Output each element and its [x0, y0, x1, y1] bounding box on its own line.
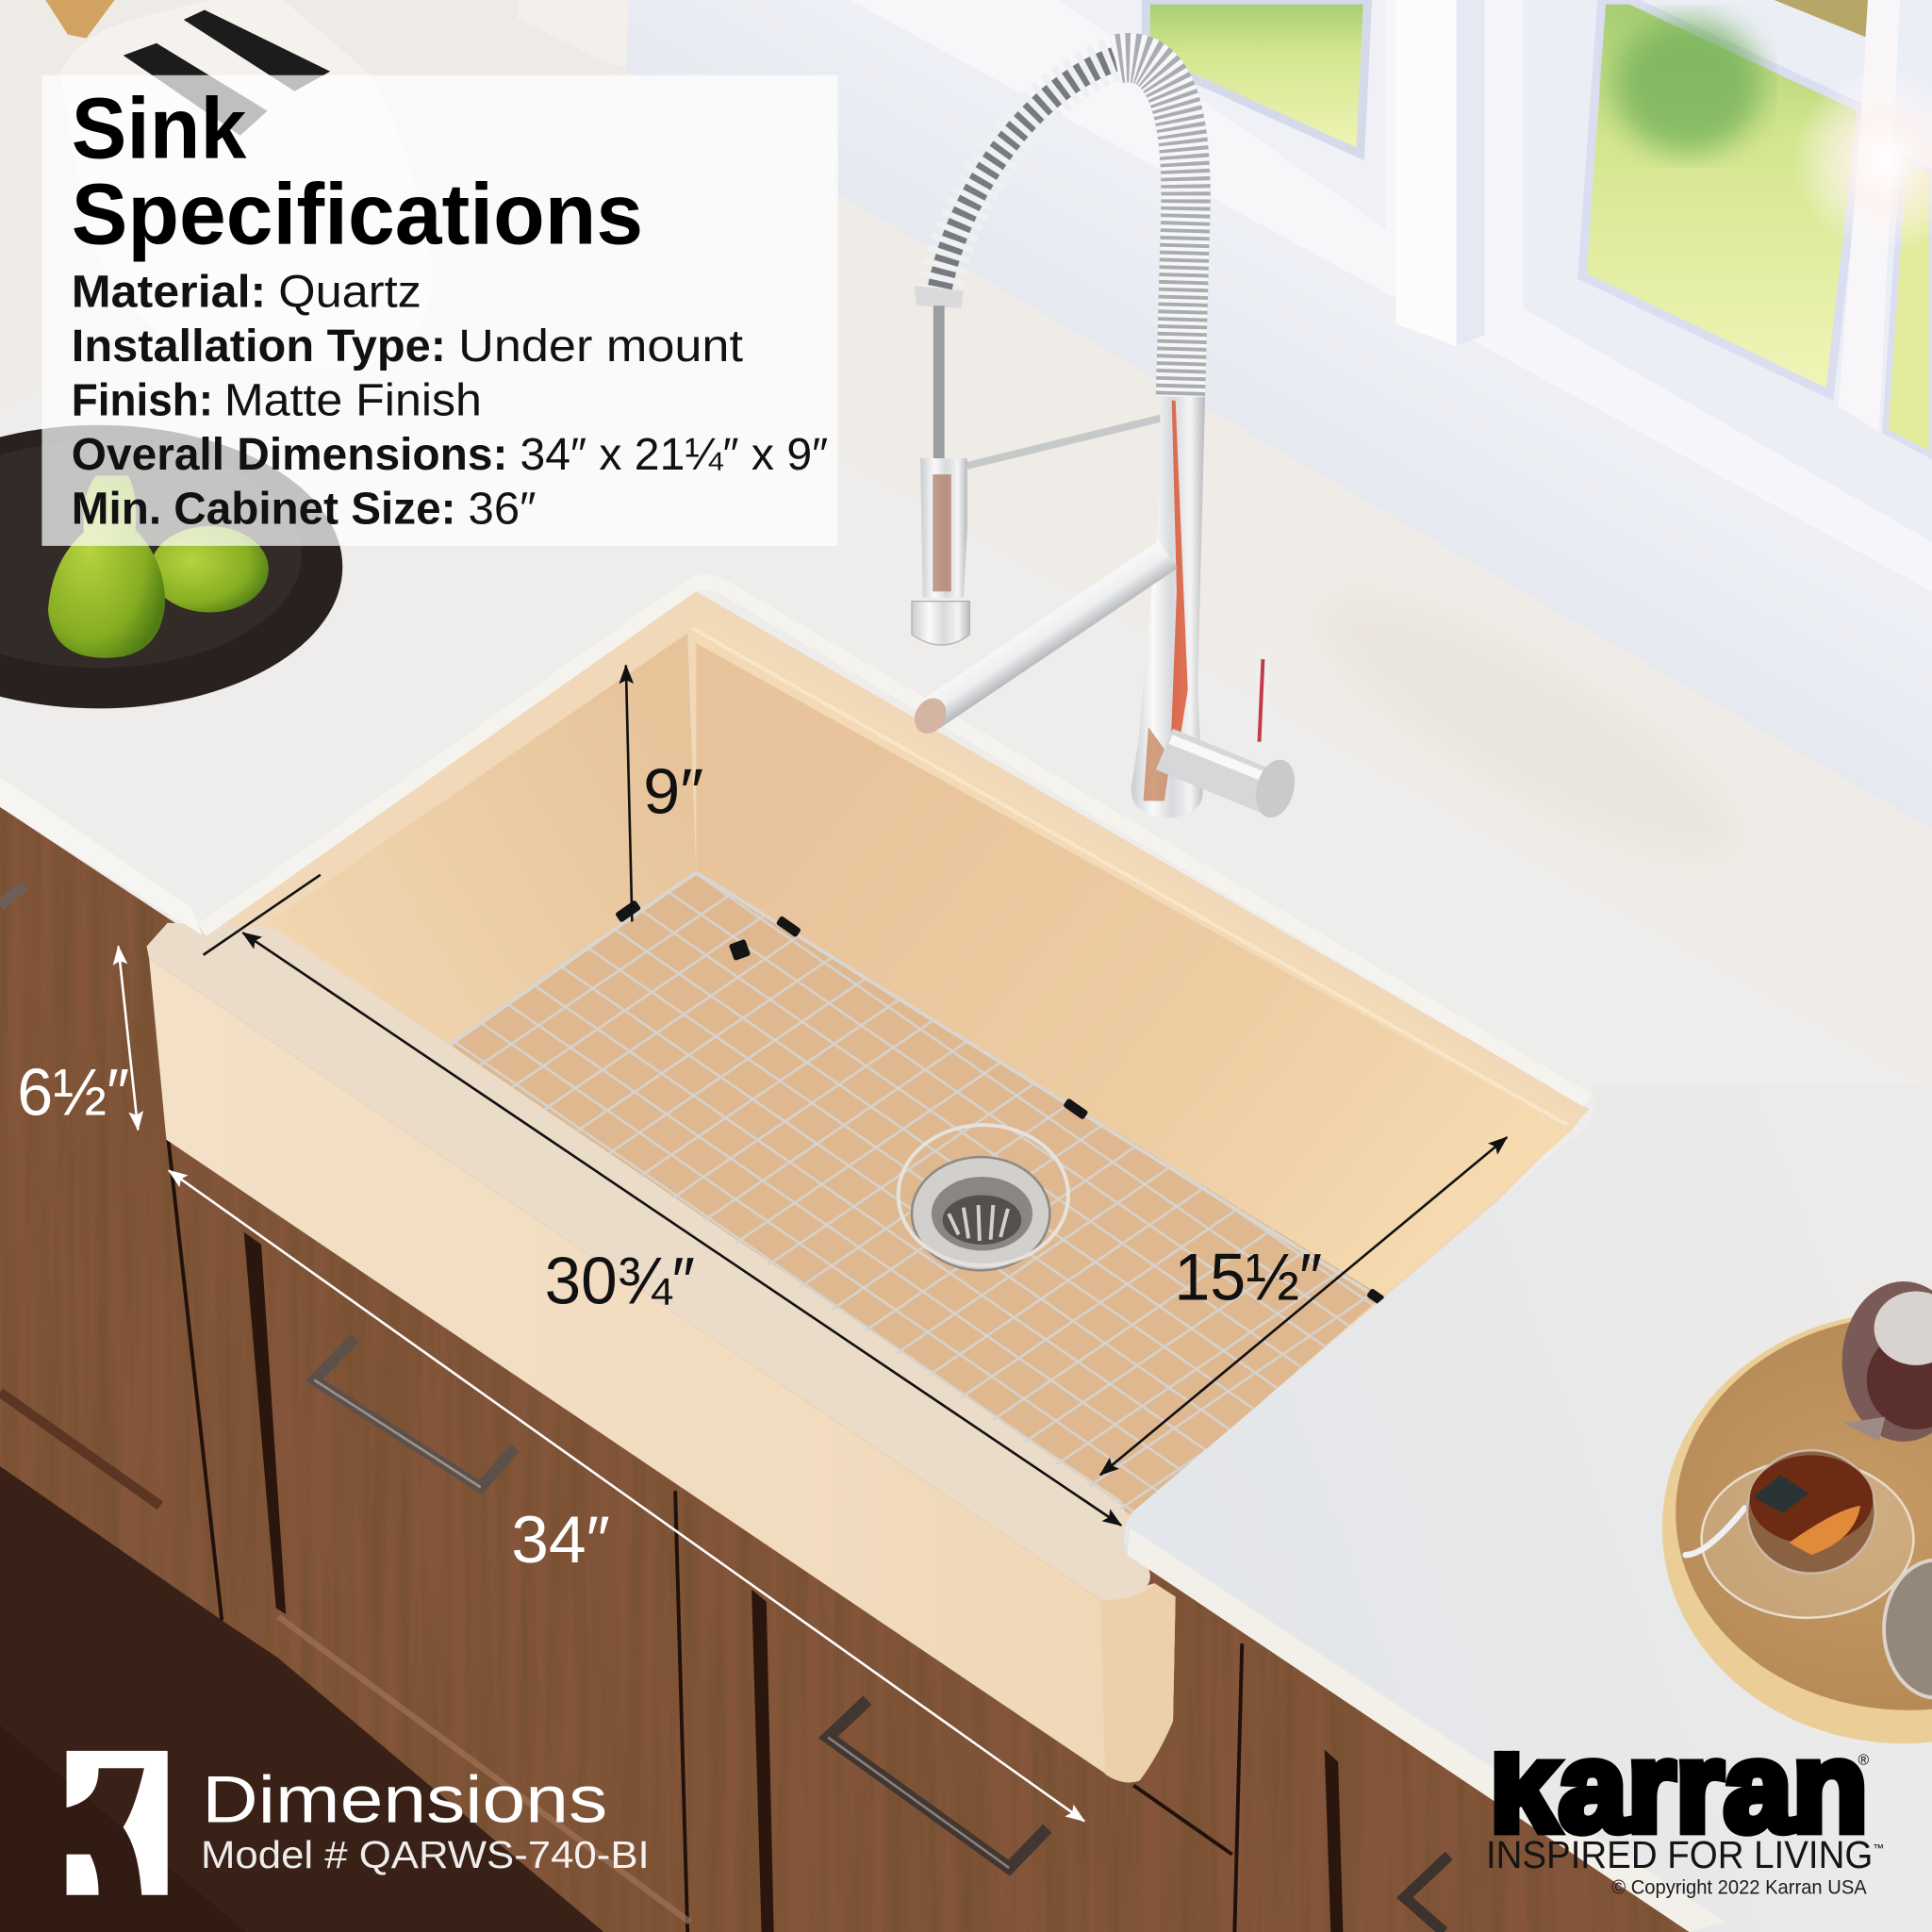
icon: Karran K mark	[67, 1751, 168, 1895]
upper left wall	[0, 0, 1932, 826]
logo wordmark: karran	[1490, 1715, 1868, 1858]
panel: sink specifications	[41, 75, 838, 546]
tray with tea set	[1662, 1281, 1932, 1743]
left counter front edge	[0, 778, 202, 935]
registered mark: ®	[1858, 1752, 1870, 1768]
pear large	[48, 475, 165, 658]
faucet body	[1131, 397, 1205, 818]
footer title: dimensions and model: Model # QARWS-740-BI	[201, 1833, 650, 1876]
dimension: 9 inch depth: 9″	[643, 755, 703, 827]
tea cup	[1747, 1450, 1875, 1574]
window pane far right	[1885, 157, 1932, 456]
teapot top	[1842, 1281, 1932, 1442]
wood cabinets	[0, 807, 1690, 1932]
dark plate	[0, 425, 342, 708]
wire grid	[431, 863, 1405, 1527]
dimension: 15 1/2 inch width	[1100, 1137, 1507, 1475]
dimension: 34 inch overall width: 34″	[511, 1502, 610, 1577]
drawer handle 3	[1405, 1856, 1449, 1932]
dimension: 30 3/4 inch length: 30¾″	[545, 1244, 695, 1318]
spec lines: Installation Type:	[72, 321, 446, 372]
toaster slot 2	[124, 43, 268, 136]
foliage	[1614, 19, 1762, 154]
grid outer wire	[450, 872, 1368, 1291]
spec lines: Material:	[72, 266, 266, 317]
drawer handle 1	[314, 1338, 515, 1487]
tray rim	[1662, 1313, 1932, 1743]
floor shadow	[0, 1725, 246, 1932]
window frame right	[1485, 0, 1932, 589]
drawer handle 2	[828, 1700, 1048, 1868]
panel background	[41, 75, 838, 546]
tray surface	[1676, 1316, 1932, 1710]
teapot bottom	[1884, 1560, 1932, 1698]
window frame	[850, 0, 1932, 591]
back ledge	[696, 610, 1583, 1131]
support arm	[967, 417, 1168, 466]
back wall	[696, 643, 1571, 1296]
drawer handle left	[0, 884, 25, 905]
post shadow gap	[1457, 0, 1485, 346]
backsplash soft marbling	[1295, 556, 1761, 898]
dimension: 15 1/2 inch width: 15½″	[1174, 1240, 1322, 1314]
drain flange	[912, 1157, 1049, 1270]
counter surface	[1124, 1084, 1932, 1932]
apron right side	[1100, 1583, 1176, 1782]
faucet	[908, 58, 1301, 822]
toaster body	[60, 0, 433, 370]
left wall	[269, 634, 696, 1045]
footer title: dimensions and model: Dimensions	[202, 1762, 607, 1837]
drain strainer	[932, 1177, 1032, 1250]
window pane right	[1582, 0, 1862, 394]
sink floor	[450, 872, 1382, 1515]
window pane upper small	[1775, 0, 1868, 37]
handle end cap	[1249, 755, 1301, 822]
handle	[1164, 750, 1275, 795]
heading: Specifications	[72, 167, 643, 263]
window muntin	[1839, 0, 1900, 431]
counter lips around sink	[0, 582, 1587, 1100]
counter front edge	[1128, 1527, 1725, 1932]
marble backsplash	[493, 72, 1932, 1087]
toaster	[60, 0, 433, 370]
farmhouse sink	[147, 591, 1590, 1782]
frame lower band left	[1060, 0, 1386, 229]
dimension: 34 inch overall width	[169, 1170, 1084, 1821]
rim top	[147, 923, 1150, 1600]
drain	[899, 1125, 1068, 1270]
spec lines: 34″ x 21¼″ x 9″	[520, 429, 828, 480]
sun glare	[1792, 68, 1932, 253]
spec lines: Quartz	[278, 266, 421, 317]
teapot spout	[1843, 1417, 1885, 1442]
rubber feet	[615, 900, 1385, 1305]
body red reflection	[1170, 401, 1188, 751]
tea leaf	[1754, 1475, 1808, 1513]
upper cabinet corner	[518, 0, 628, 68]
sink edge lip	[202, 582, 1587, 1100]
spec lines: Overall Dimensions:	[72, 429, 507, 480]
toaster slot 1	[184, 9, 330, 91]
tagline: INSPIRED FOR LIVING	[1486, 1833, 1873, 1876]
dimension: 9 inch depth	[626, 666, 703, 921]
spout	[931, 554, 1168, 715]
heading	[72, 80, 643, 263]
copyright: © Copyright 2022 Karran USA	[1611, 1876, 1867, 1898]
spec lines: Under mount	[458, 321, 744, 372]
cabinet gaps	[168, 1133, 1242, 1932]
cabinet base	[0, 807, 1725, 1932]
spray head base	[912, 602, 969, 645]
plate with pears	[0, 425, 342, 708]
apron front	[149, 959, 1176, 1782]
sink interior base	[202, 591, 1590, 1555]
wooden utensils	[45, 0, 115, 39]
lemon slice	[1789, 1506, 1860, 1555]
spring collar	[915, 286, 964, 308]
plate inner	[0, 441, 302, 668]
trademark: ™	[1873, 1842, 1884, 1855]
dimension: 30 3/4 inch length	[204, 875, 1121, 1526]
window pane left	[1146, 0, 1368, 154]
spoon	[1686, 1508, 1744, 1555]
window wall	[0, 0, 1932, 1087]
floor	[0, 1466, 603, 1932]
spec lines: Finish:	[72, 374, 213, 425]
spray head	[920, 458, 967, 598]
window sill	[626, 0, 1932, 829]
grid ring	[899, 1125, 1068, 1265]
dimension: 6 1/2 inch apron height	[17, 947, 138, 1130]
spec lines: Min. Cabinet Size:	[72, 483, 456, 534]
hose	[934, 305, 943, 458]
pear small	[150, 526, 269, 612]
right countertop	[1124, 1084, 1932, 1932]
footer title: dimensions and model	[201, 1762, 650, 1876]
wood grain	[0, 807, 1658, 1932]
saucer	[1702, 1461, 1913, 1618]
frame right inner band	[1523, 0, 1932, 542]
Karran logo	[1490, 1750, 1883, 1898]
spring left section	[939, 59, 1115, 293]
spec lines: Matte Finish	[224, 374, 482, 425]
spec lines	[72, 266, 828, 534]
window post	[1396, 0, 1457, 346]
panel recess	[244, 1232, 1343, 1932]
spout end	[908, 692, 952, 739]
tea	[1750, 1455, 1873, 1544]
heading: Sink	[72, 80, 246, 176]
spec lines: 36″	[469, 483, 536, 534]
spring right section	[1115, 58, 1186, 397]
lever	[1260, 651, 1264, 742]
body lower reflection	[1144, 727, 1170, 801]
dimension: 6 1/2 inch apron height: 6½″	[17, 1055, 129, 1130]
door moulding	[278, 1616, 690, 1923]
